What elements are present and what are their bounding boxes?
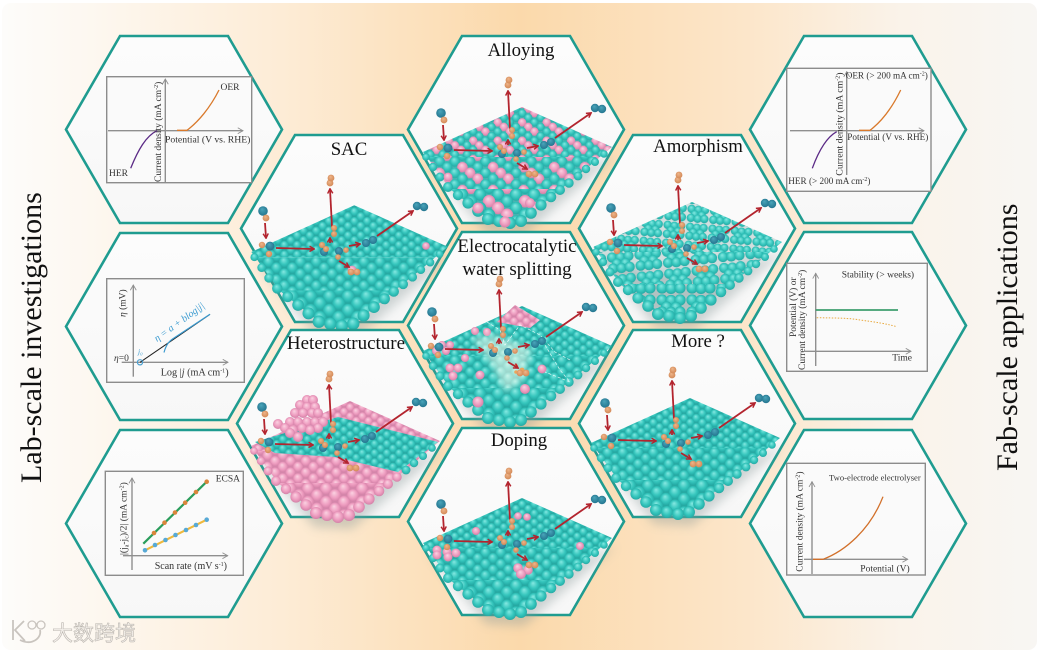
panel: fab-scale polarization curve: [750, 36, 966, 223]
panel: two-electrode electrolyser plot: Two-electrode electrolyser: [829, 473, 921, 483]
heading: Alloying: Alloying: [488, 40, 555, 61]
panel: Amorphism: [579, 135, 795, 330]
panel: ECSA plot: |(j: [120, 547, 130, 555]
side title: fab-scale applications: Fab-scale applications: [991, 204, 1024, 471]
panel: two-electrode electrolyser plot: -2: [796, 475, 802, 480]
panel: ECSA plot: ECSA: [216, 475, 240, 485]
panel: Electrocatalytic water splitting: [408, 232, 624, 434]
panel: fab-scale polarization curve: HER (> 200 mA cm: [788, 176, 862, 186]
heading: Doping: Doping: [491, 430, 548, 451]
panel: lab-scale polarization curve: -2: [154, 85, 160, 90]
panel: Doping: [408, 428, 624, 626]
panel: Tafel plot: ): [225, 368, 229, 379]
panel: ECSA plot: ): [119, 482, 130, 485]
panel: stability plot: Potential (V) or: [788, 277, 799, 337]
panel: Tafel plot: [66, 233, 282, 420]
panel: Tafel plot: η=0: [114, 354, 129, 364]
panel: ECSA plot: Scan rate (mV s: [155, 561, 219, 572]
panel: More ?: [579, 330, 795, 526]
panel: fab-scale polarization curve: ): [925, 70, 928, 80]
panel: Alloying: [408, 36, 624, 235]
panel: stability plot: [750, 232, 966, 419]
heading: Electrocatalytic water splitting: water splitting: [462, 259, 572, 280]
panel: Tafel plot: η (mV): [118, 289, 129, 317]
side title: lab-scale investigations: Lab-scale investigations: [15, 192, 48, 483]
panel: ECSA plot: -2: [120, 485, 126, 490]
panel: Tafel plot: η = a + blog|j|: [152, 301, 207, 344]
heading: More ?: More ?: [671, 331, 725, 352]
panel: ECSA plot: )/2| (mA cm: [119, 490, 130, 536]
panel: fab-scale polarization curve: ): [867, 176, 870, 186]
panel: Tafel plot: Log |j (mA cm: [161, 368, 220, 379]
panel: ECSA plot: a: [125, 544, 131, 547]
panel: ECSA plot: c: [125, 536, 131, 539]
panel: ECSA plot: -1: [219, 562, 224, 568]
panel: stability plot: -2: [798, 273, 804, 278]
panel: stability plot: Current density (mA cm: [798, 278, 808, 370]
panel: ECSA plot: [66, 430, 282, 617]
panel: fab-scale polarization curve: Potential (V vs. RHE): [847, 132, 928, 142]
panel: two-electrode electrolyser plot: ): [795, 471, 806, 475]
panel: fab-scale polarization curve: -2: [862, 177, 867, 183]
panel: fab-scale polarization curve: Current density (mA cm: [835, 81, 846, 176]
panel: lab-scale polarization curve: Current density (mA cm: [154, 90, 164, 182]
panel: Tafel plot: j₀: [137, 347, 143, 356]
panel: Heterostructure: [237, 330, 453, 529]
panel: stability plot: Time: [892, 353, 912, 363]
heading: SAC: SAC: [331, 139, 367, 160]
heading: Heterostructure: Heterostructure: [287, 333, 405, 354]
panel: lab-scale polarization curve: ): [153, 82, 164, 85]
watermark: 大数跨境: [52, 622, 136, 646]
panel: lab-scale polarization curve: HER: [109, 169, 129, 179]
panel: two-electrode electrolyser plot: Potential (V): [860, 564, 910, 575]
panel: lab-scale polarization curve: [66, 36, 282, 223]
panel: lab-scale polarization curve: Potential (V vs. RHE): [165, 135, 250, 146]
heading: Electrocatalytic water splitting: Electrocatalytic: [457, 236, 577, 257]
heading: Amorphism: Amorphism: [653, 136, 743, 157]
panel: ECSA plot: -j: [120, 539, 130, 545]
panel: fab-scale polarization curve: -2: [920, 71, 925, 77]
panel: SAC: [241, 135, 457, 338]
panel: two-electrode electrolyser plot: [750, 430, 966, 617]
panel: stability plot: ): [797, 270, 808, 273]
panel: Tafel plot: -1: [220, 369, 225, 375]
panel: lab-scale polarization curve: OER: [220, 83, 240, 93]
panel: fab-scale polarization curve: OER (> 200 mA cm: [846, 70, 920, 80]
panel: ECSA plot: ): [224, 561, 227, 572]
watermark: [13, 620, 136, 646]
panel: two-electrode electrolyser plot: Current density (mA cm: [796, 480, 806, 572]
panel: stability plot: Stability (> weeks): [842, 269, 914, 280]
panel: fab-scale polarization curve: -2: [836, 76, 842, 81]
panel: fab-scale polarization curve: ): [835, 72, 846, 76]
